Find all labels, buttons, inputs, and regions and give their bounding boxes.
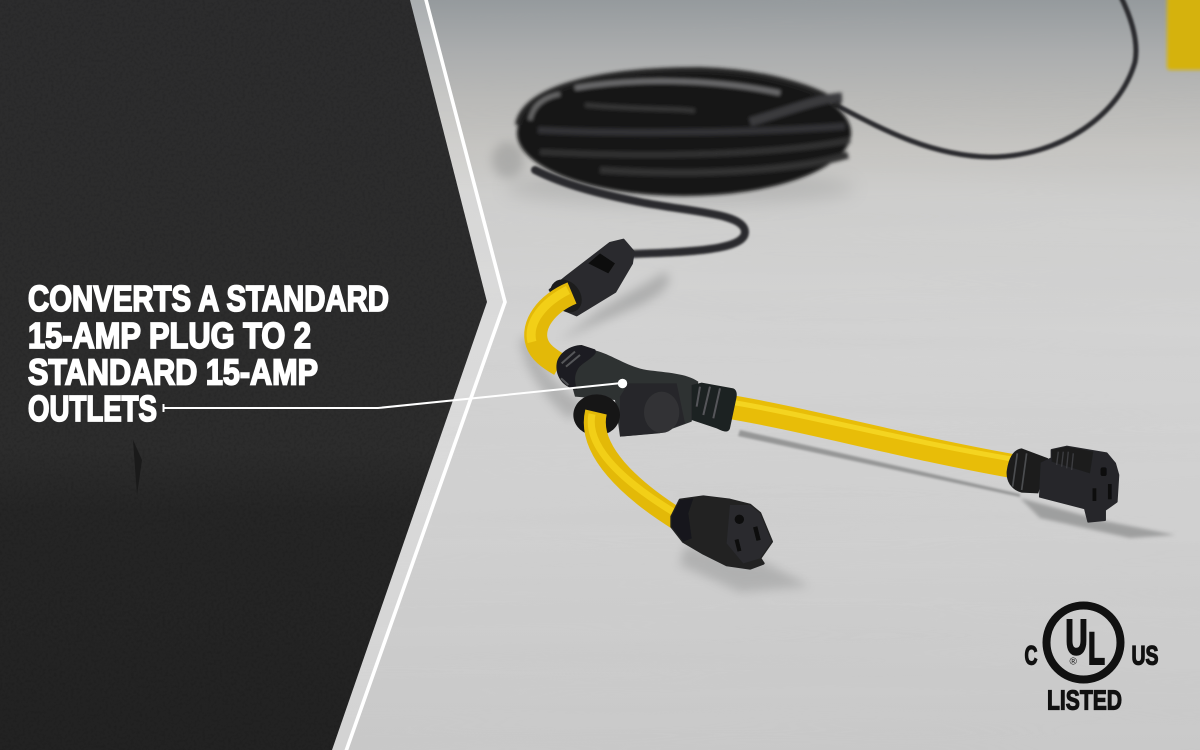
heading: callout text: OUTLETS (28, 388, 157, 429)
heading: callout text: 15-AMP PLUG TO 2 (28, 315, 311, 356)
cable coil (517, 70, 851, 196)
UL listed certification mark: US (1132, 640, 1158, 670)
UL listed certification mark: LISTED (1047, 684, 1122, 716)
right socket (1007, 447, 1118, 522)
T connector (556, 345, 737, 437)
yellow cable: plug to T connector (531, 290, 572, 365)
left socket (672, 497, 772, 568)
yellow object in background (1167, 0, 1200, 70)
chevron translucent band (332, 0, 505, 750)
UL listed certification mark: L (1088, 623, 1105, 674)
yellow cable: T connector to left socket (591, 412, 682, 522)
UL listed certification mark: U (1066, 611, 1088, 665)
UL listed certification mark: ® (1070, 656, 1078, 668)
UL listed certification mark (1024, 606, 1158, 716)
heading: callout text: STANDARD 15-AMP (28, 352, 318, 392)
floor shadows (492, 142, 1175, 592)
heading: callout text: CONVERTS A STANDARD (28, 278, 389, 319)
leader line with dot pointing to T connector (164, 379, 627, 412)
heading: callout text (28, 278, 389, 429)
cable: coil to male plug (535, 170, 745, 254)
dark chevron panel (0, 0, 520, 750)
UL listed certification mark: C (1024, 640, 1038, 670)
yellow cable: T connector to right socket (724, 401, 1012, 466)
chevron white outline (345, 0, 505, 750)
cable: coil tail to right, rising out of frame (832, 0, 1136, 157)
male plug (544, 240, 633, 319)
